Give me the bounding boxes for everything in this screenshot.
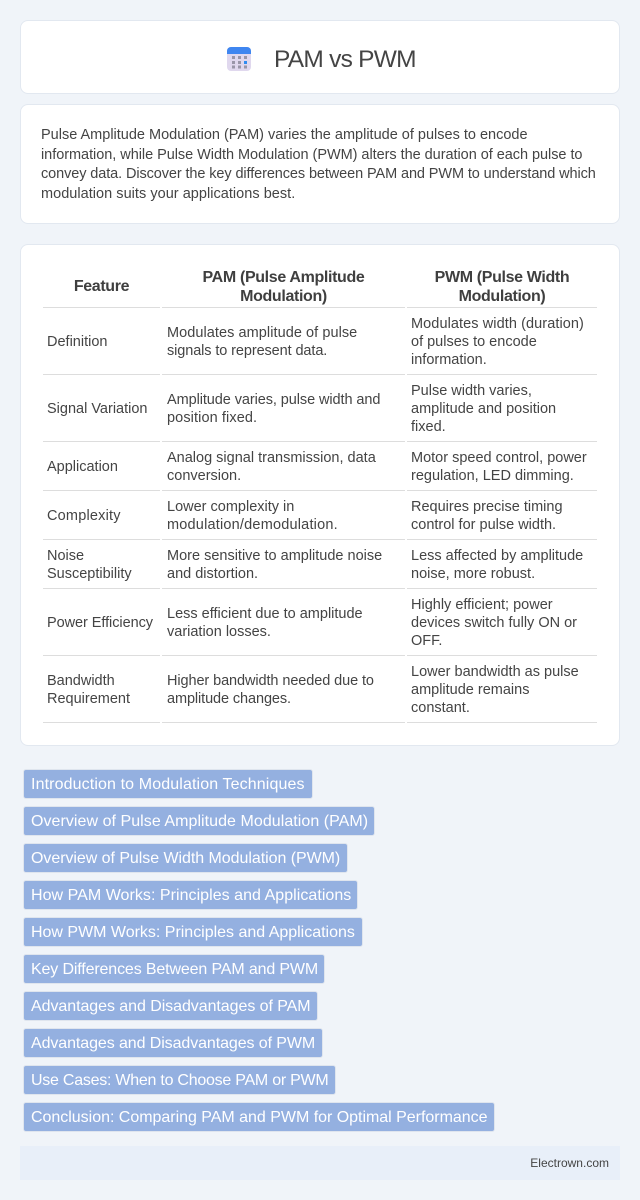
table rows: Definition [47,334,107,350]
chip: use cases: Use Cases: When to Choose PAM or PWM [31,1072,328,1089]
chip: how PAM works: How PAM Works: Principles and Applications [31,887,351,904]
table header: PAM (Pulse Amplitude [203,269,364,286]
table rows: modulation/demodulation. [167,517,338,533]
table header: Modulation) [240,288,327,305]
chip: overview PWM: Overview of Pulse Width Modulation (PWM) [31,850,340,867]
chip: overview PAM: Overview of Pulse Amplitude Modulation (PAM) [31,813,368,830]
chip: conclusion [23,1102,495,1132]
table rows: Highly efficient; power [411,597,553,613]
intro text [41,127,596,202]
table rows: Analog signal transmission, data [167,450,376,466]
table rows: Requirement [47,691,130,707]
chip: advantages PWM: Advantages and Disadvantages of PWM [31,1035,315,1052]
table rows [43,307,597,723]
chip: overview PWM [23,843,348,873]
table rows: amplitude and position [411,401,556,417]
table rows: Signal Variation [47,401,148,417]
table rows: Power Efficiency [47,615,153,631]
table rows: information. [411,352,487,368]
table rows: fixed. [411,419,446,435]
table rows: constant. [411,700,470,716]
table rows: Modulates width (duration) [411,316,584,332]
chip: key differences [23,954,325,984]
table rows: Bandwidth [47,673,115,689]
table rows: Motor speed control, power [411,450,587,466]
title: PAM vs PWM [274,46,416,73]
table rows: Susceptibility [47,566,132,582]
chip: advantages PAM [23,991,318,1021]
table rows: and distortion. [167,566,258,582]
chip: advantages PAM: Advantages and Disadvantages of PAM [31,998,311,1015]
table rows: noise, more robust. [411,566,535,582]
panel: comparison table [20,244,620,746]
chip: advantages PWM [23,1028,323,1058]
chip: introduction [23,769,313,799]
chip: how PWM works: How PWM Works: Principles and Applications [31,924,355,941]
list of section links [23,769,495,1132]
table rows: Requires precise timing [411,499,563,515]
chip: overview PAM [23,806,375,836]
table rows: position fixed. [167,410,257,426]
chip: how PAM works [23,880,358,910]
intro text: information, while Pulse Width Modulation (PWM) alters the duration of each pulse to [41,146,582,162]
chip: use cases [23,1065,336,1095]
table header: Feature [74,278,129,295]
table rows: control for pulse width. [411,517,556,533]
table rows: variation losses. [167,624,271,640]
table header [74,269,569,305]
table rows: Application [47,459,118,475]
footer [20,1146,620,1180]
table rows: regulation, LED dimming. [411,468,574,484]
table rows: of pulses to encode [411,334,537,350]
table rows: Amplitude varies, pulse width and [167,392,380,408]
chip: key differences: Key Differences Between PAM and PWM [31,961,318,978]
table rows: Less efficient due to amplitude [167,606,363,622]
intro text: modulation suits your applications best. [41,186,295,202]
panel: introduction [20,104,620,224]
table rows: amplitude remains [411,682,529,698]
table header: Modulation) [459,288,545,305]
footer credit: Electrown.com [530,1156,609,1170]
table rows: Complexity [47,508,121,524]
chip: conclusion: Conclusion: Comparing PAM and PWM for Optimal Performance [31,1109,488,1126]
table header: PWM (Pulse Width [435,269,569,286]
table rows: OFF. [411,633,442,649]
table rows: Pulse width varies, [411,383,532,399]
panel: title card [20,20,620,94]
table rows: Noise [47,548,84,564]
intro text: convey data. Discover the key differences between PAM and PWM to understand which [41,166,596,182]
table rows: Modulates amplitude of pulse [167,325,357,341]
table rows: More sensitive to amplitude noise [167,548,382,564]
table rows: signals to represent data. [167,343,327,359]
table rows: Lower bandwidth as pulse [411,664,579,680]
table rows: Higher bandwidth needed due to [167,673,374,689]
table rows: Lower complexity in [167,499,294,515]
chip: introduction: Introduction to Modulation Techniques [31,776,305,793]
icon: calendar grid [227,47,251,71]
table rows: amplitude changes. [167,691,291,707]
chip: how PWM works [23,917,363,947]
intro text: Pulse Amplitude Modulation (PAM) varies the amplitude of pulses to encode [41,127,528,143]
table rows: Less affected by amplitude [411,548,583,564]
table rows: conversion. [167,468,241,484]
table rows: devices switch fully ON or [411,615,577,631]
